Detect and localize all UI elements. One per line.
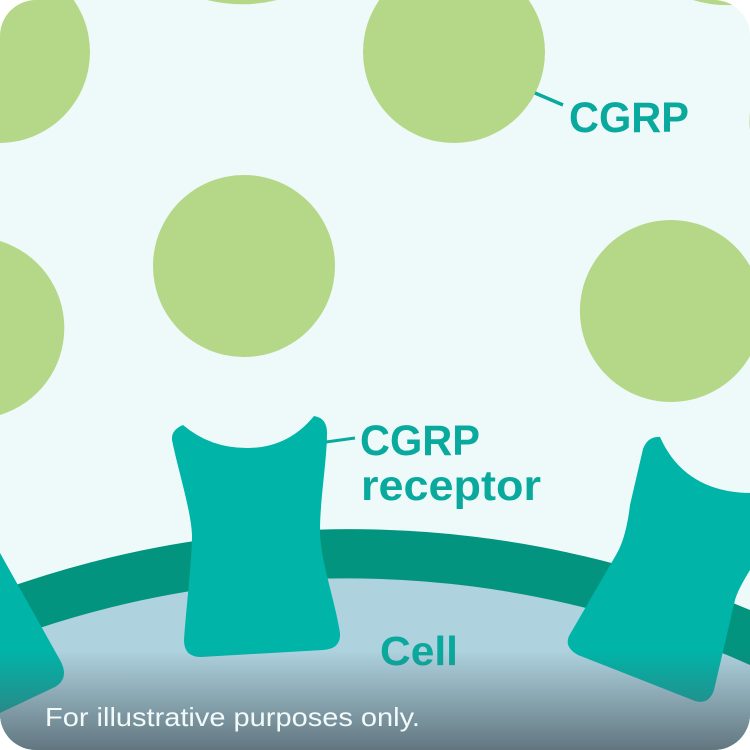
CGRP receptor: centre [172,416,340,657]
CGRP receptor: right [568,437,750,702]
leader line: CGRP [535,93,563,105]
label: CGRP receptor: CGRP [360,417,480,465]
bottom shading [0,650,750,750]
label: Cell: Cell [380,628,458,674]
CGRP molecules [0,0,750,415]
cell membrane [0,529,750,750]
label: CGRP: CGRP [569,94,689,142]
label: CGRP receptor: receptor [361,462,541,510]
CGRP receptor: left [0,553,64,713]
caption: For illustrative purposes only. [45,702,420,732]
leader line: CGRP receptor [326,438,355,442]
cell interior [0,578,750,750]
